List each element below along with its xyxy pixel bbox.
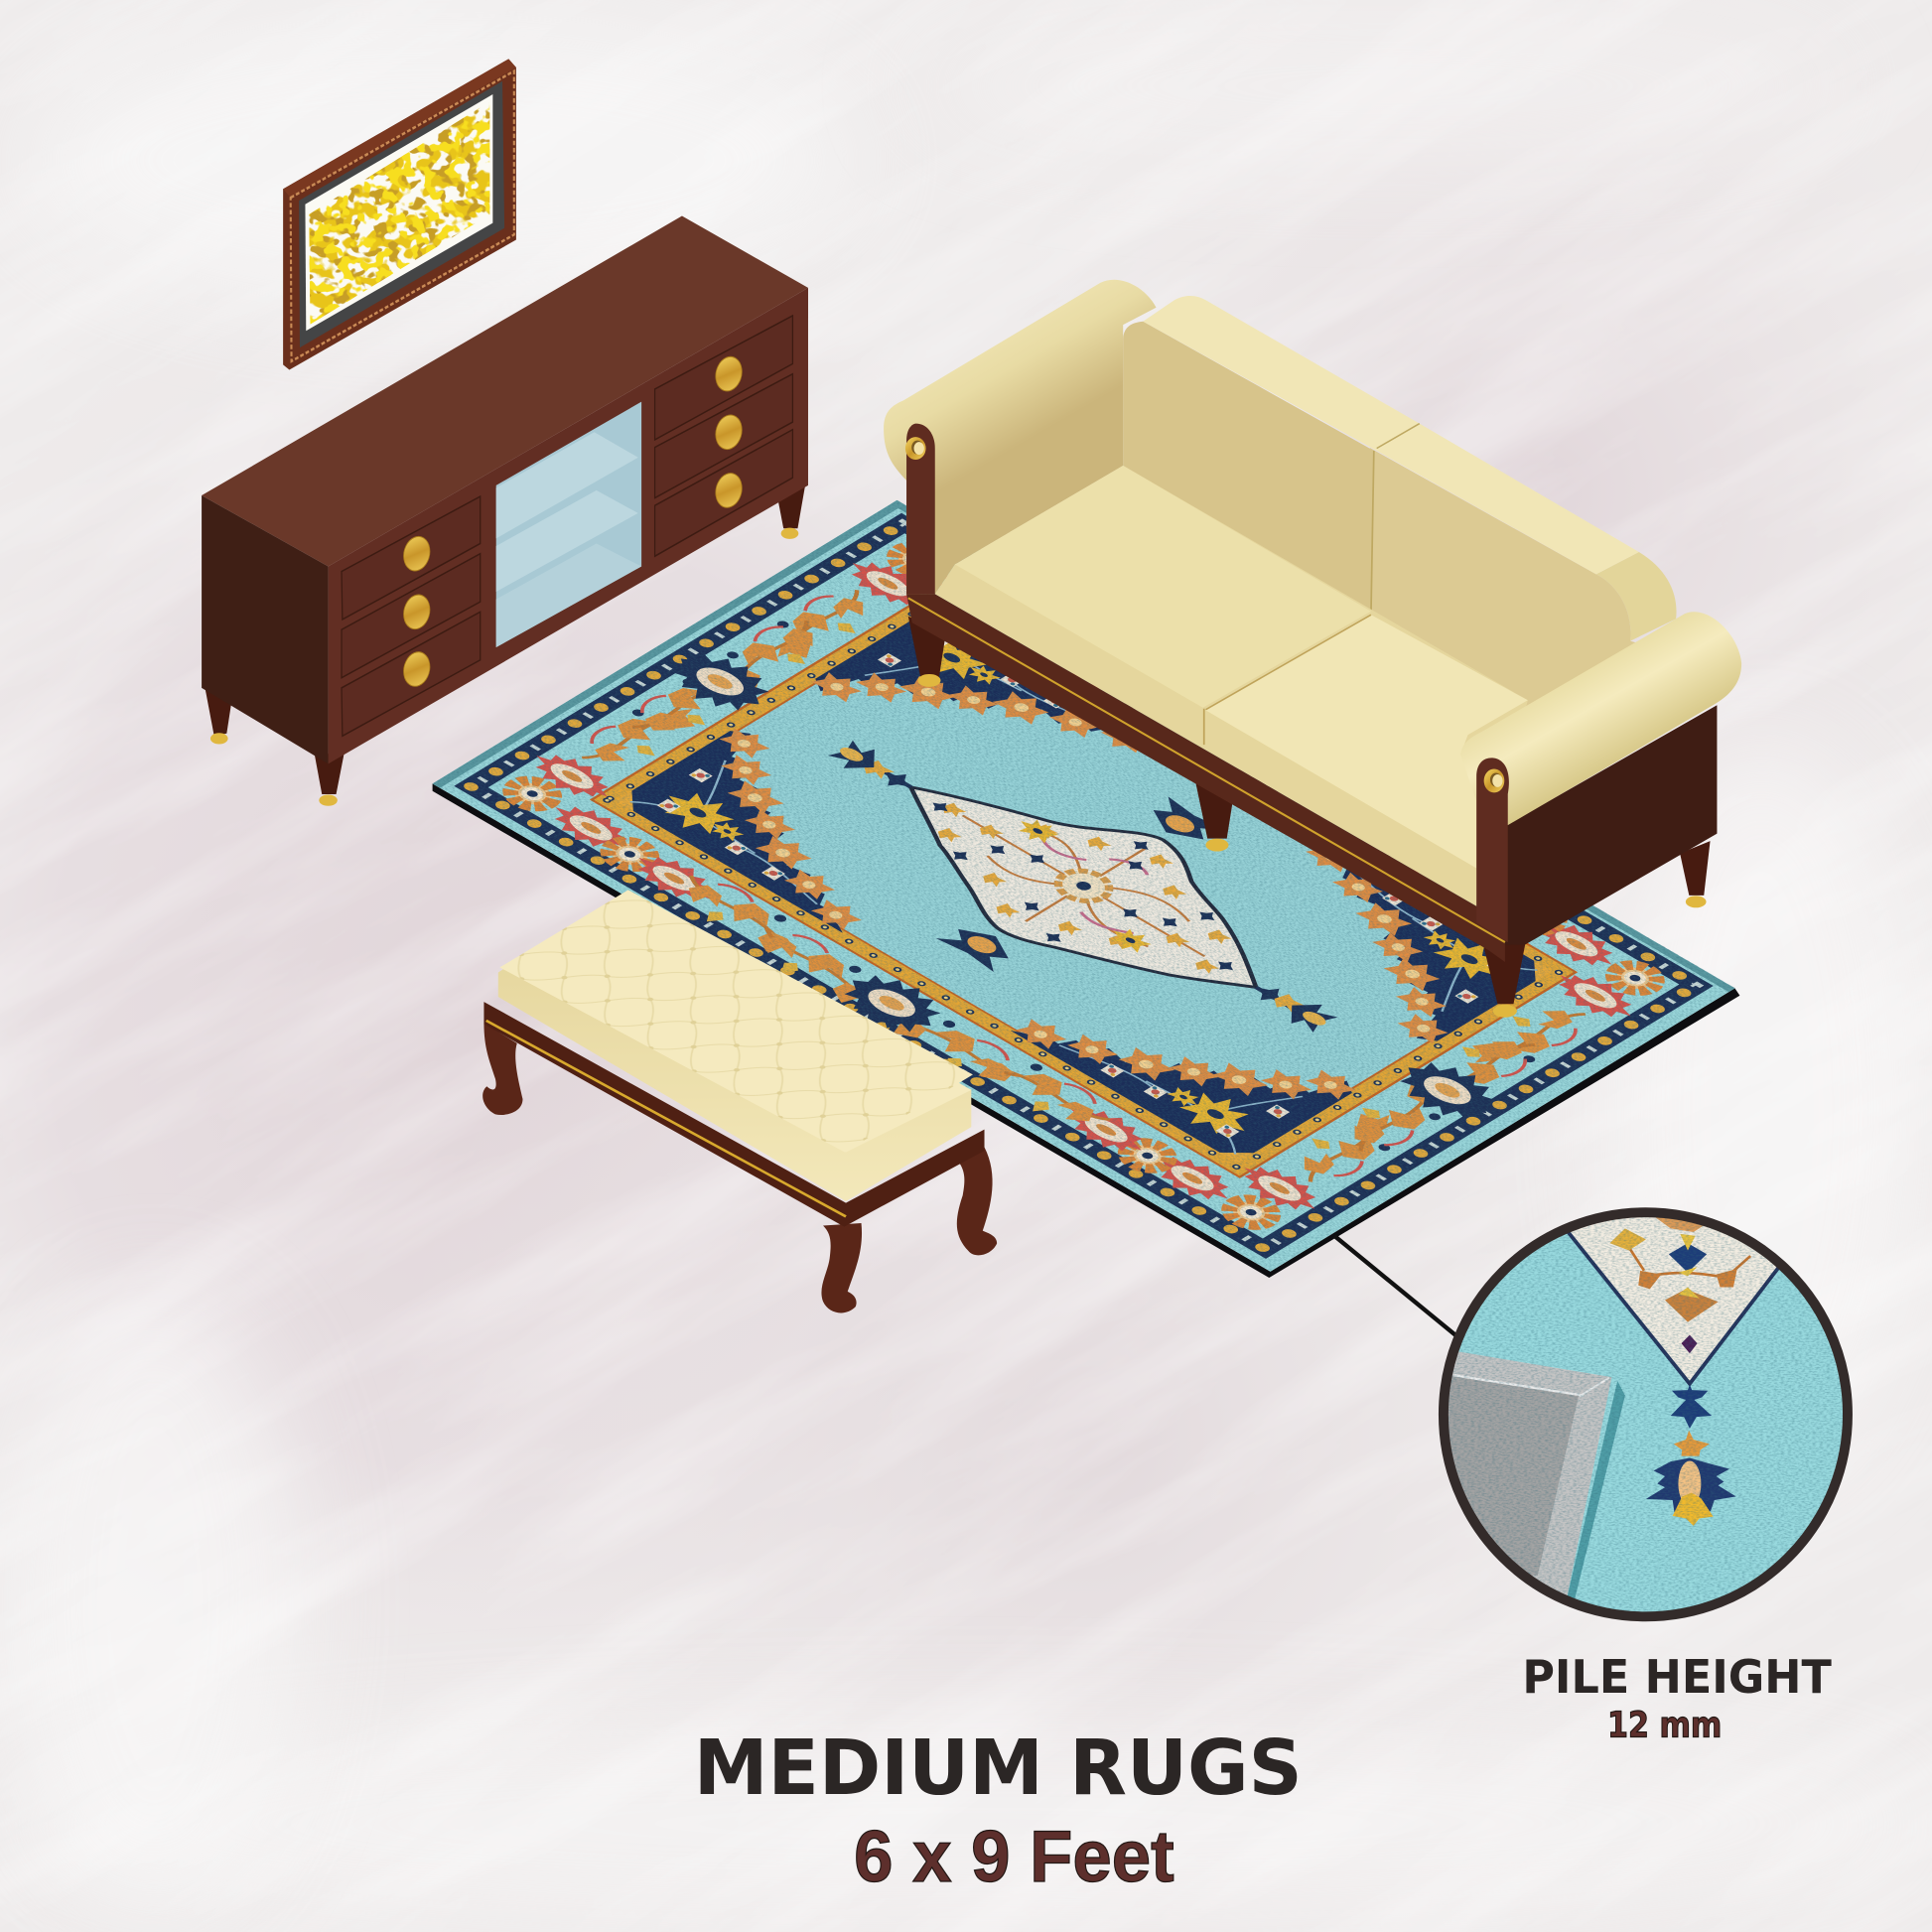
- bench legs: [483, 1024, 997, 1312]
- sofa left arm post: [905, 424, 935, 594]
- label: pile height value: 12 mm: [1607, 1705, 1722, 1745]
- cabinet: wooden media console: [202, 215, 808, 806]
- rug pile texture: [433, 500, 1734, 1272]
- sofa: cream two seat sofa: [884, 280, 1741, 1018]
- sofa legs: [908, 617, 1711, 1018]
- callout: rug close-up circle: [1438, 1207, 1853, 1622]
- rug gold band: [592, 595, 1576, 1177]
- painting: gold blotches: [309, 102, 490, 324]
- sofa left arm: [884, 280, 1157, 594]
- rug corners and border ornaments: [467, 520, 1701, 1251]
- rug medallion: [835, 739, 1334, 1035]
- sofa front rail with gold inlay: [906, 594, 1505, 962]
- sofa backrest: [1123, 296, 1677, 753]
- bench: tufted ottoman: [483, 890, 997, 1312]
- subtitle: size: 6 x 9 Feet: [854, 1816, 1174, 1897]
- pendant flower: [1646, 1385, 1736, 1526]
- rug guard border: [471, 523, 1697, 1249]
- medallion tip: [1568, 1204, 1788, 1384]
- open shelves: [496, 402, 641, 647]
- rug medallion pendants: [728, 675, 1440, 1097]
- label: pile height: PILE HEIGHT: [1522, 1650, 1833, 1704]
- bench wooden rail: [483, 1002, 985, 1227]
- callout ring: [1444, 1212, 1848, 1616]
- drawer knobs: [398, 351, 747, 692]
- drawers: [342, 316, 792, 736]
- bench cushion: [498, 890, 973, 1201]
- wall art: framed painting: [283, 59, 516, 370]
- sofa seat cushions: [935, 466, 1528, 906]
- sofa outer side: [1505, 705, 1717, 945]
- cabinet feet: [205, 485, 805, 806]
- rug field: [607, 604, 1561, 1168]
- folded rug corner: [1435, 1348, 1625, 1603]
- callout line: [1334, 1236, 1457, 1337]
- sofa right arm post: [1476, 758, 1509, 942]
- cabinet body: [202, 215, 808, 763]
- title: MEDIUM RUGS: [694, 1724, 1303, 1812]
- rug: persian style area rug: [433, 500, 1739, 1278]
- sofa right arm: [1460, 612, 1741, 825]
